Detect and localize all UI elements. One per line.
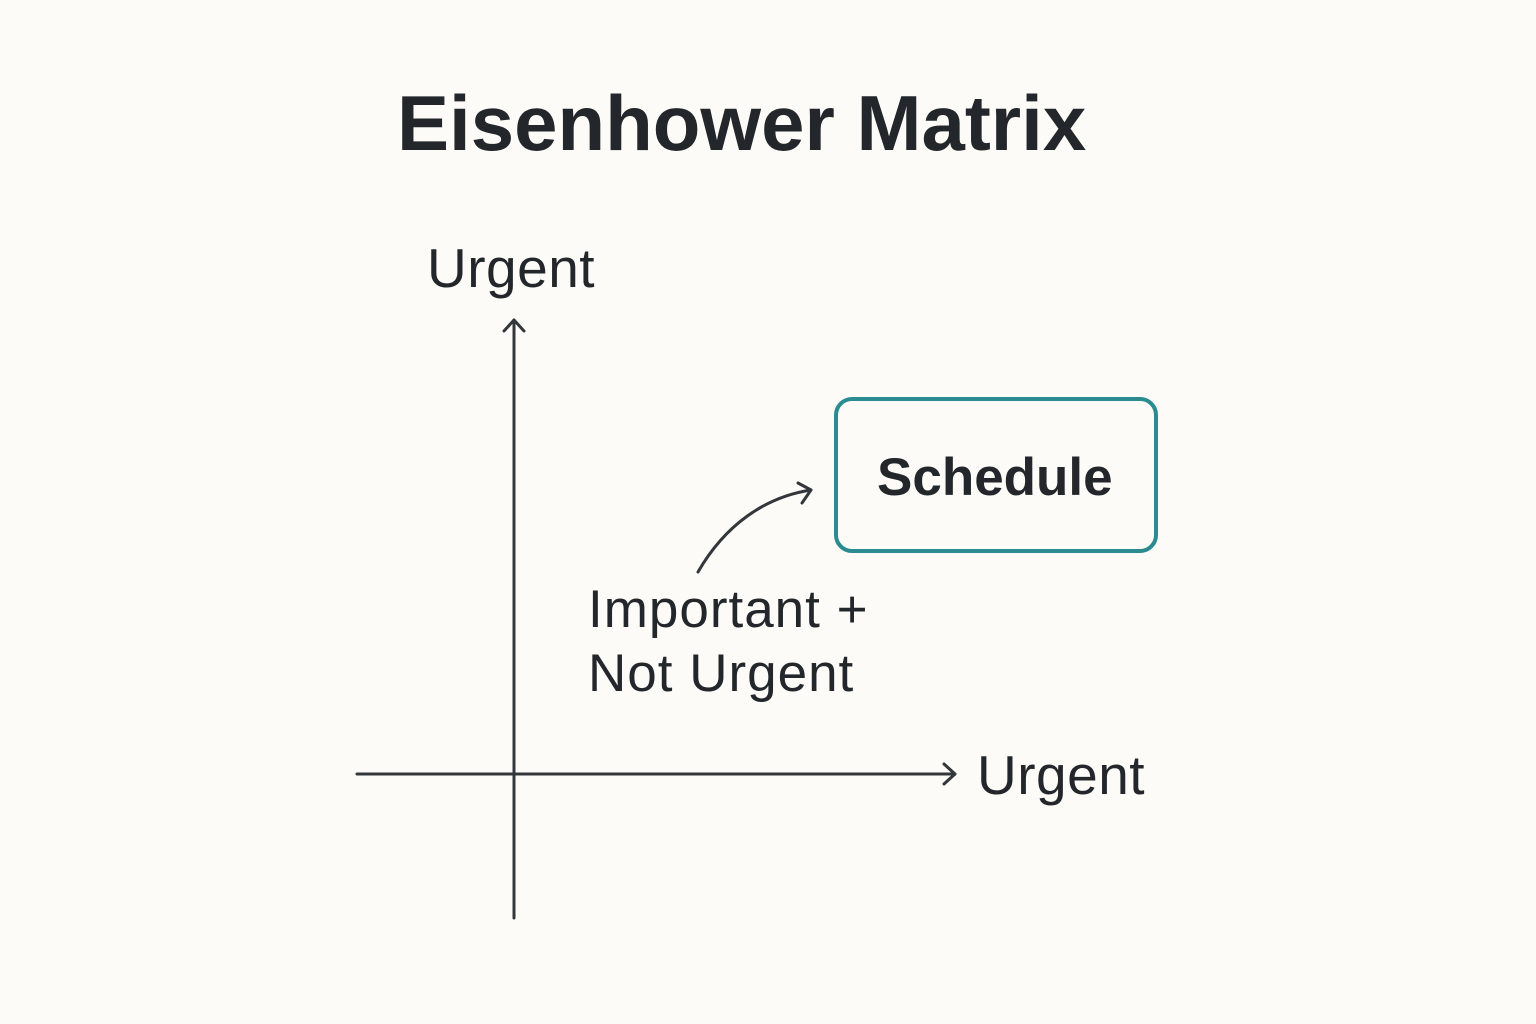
vertical axis arrow <box>504 320 524 918</box>
vertical axis label: Urgent <box>427 237 595 299</box>
quadrant label: Not Urgent <box>588 644 854 703</box>
quadrant label: Important + <box>588 580 869 639</box>
title: Eisenhower Matrix <box>397 79 1086 167</box>
horizontal axis arrow <box>357 764 955 784</box>
box label: Schedule <box>877 448 1113 507</box>
curved arrow to Schedule <box>698 483 811 572</box>
box: Schedule <box>834 397 1158 553</box>
horizontal axis label: Urgent <box>977 744 1145 806</box>
quadrant label <box>588 580 869 703</box>
